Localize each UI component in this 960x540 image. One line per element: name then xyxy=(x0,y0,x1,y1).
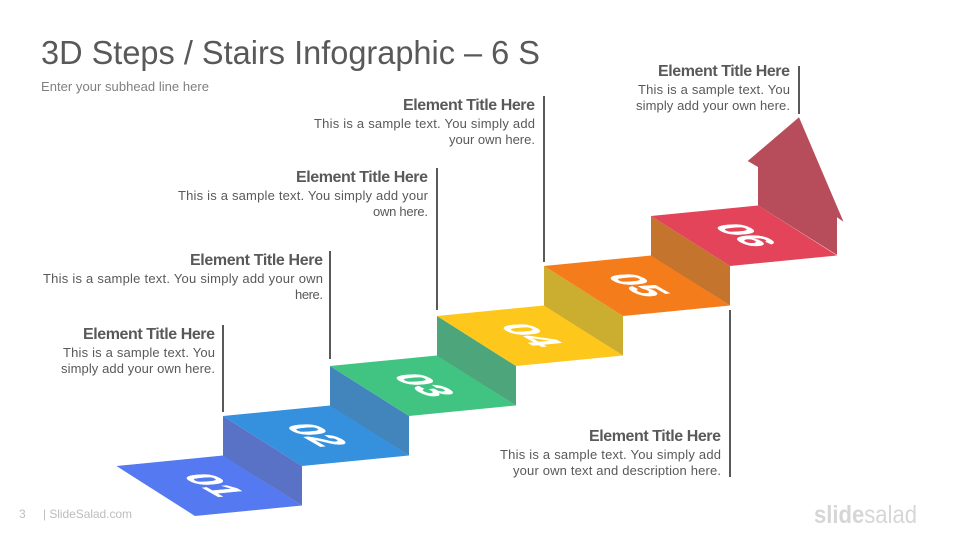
callout: step 3 xyxy=(178,168,438,310)
step 6 tread xyxy=(651,206,837,266)
callout: step 6 xyxy=(636,63,800,114)
callout: step 2 xyxy=(43,251,331,359)
step 1 tread xyxy=(116,456,302,516)
footer site: | SlideSalad.com xyxy=(43,507,132,521)
callout: step 5: Element Title Here xyxy=(589,428,721,445)
number 04: 04 xyxy=(489,322,574,348)
callout: step 2: Element Title Here xyxy=(190,252,323,269)
page number: 3 xyxy=(19,507,26,521)
step 3 riser xyxy=(330,366,409,456)
stair diagram xyxy=(116,117,844,516)
callout: step 1 xyxy=(61,325,224,412)
step 5 tread xyxy=(544,256,730,316)
number 01: 01 xyxy=(172,472,257,498)
callout: step 2: here. xyxy=(295,287,323,302)
step 2 tread xyxy=(223,406,409,466)
callout: step 3: This is a sample text. You simply add your xyxy=(178,188,429,203)
callout: step 1: This is a sample text. You xyxy=(63,345,215,360)
callout: step 5: your own text and description here. xyxy=(513,463,721,478)
callout: step 1: Element Title Here xyxy=(83,326,215,343)
callout: step 4: This is a sample text. You simply add xyxy=(314,116,535,131)
callout: step 6: This is a sample text. You xyxy=(638,82,790,97)
title: 3D Steps / Stairs Infographic – 6 S xyxy=(41,34,540,71)
logo wordmark: slidesalad xyxy=(814,501,917,529)
callout: step 6: Element Title Here xyxy=(658,63,790,80)
number 05: 05 xyxy=(596,272,681,298)
callout: step 6: simply add your own here. xyxy=(636,98,790,113)
callout: step 1: simply add your own here. xyxy=(61,361,215,376)
callout: step 4 xyxy=(314,96,545,262)
number 02: 02 xyxy=(274,422,360,448)
step 2 riser xyxy=(223,416,302,506)
step 4 tread xyxy=(437,306,623,366)
callout: step 4: your own here. xyxy=(449,132,535,147)
arrow: side face xyxy=(748,117,844,255)
callout: step 5: This is a sample text. You simply add xyxy=(500,447,721,462)
step 3 tread xyxy=(330,356,516,416)
subhead: Enter your subhead line here xyxy=(41,79,209,94)
number 06: 06 xyxy=(703,222,788,248)
number 03: 03 xyxy=(382,372,467,398)
step 6 riser xyxy=(651,216,730,306)
step 4 riser xyxy=(437,316,516,406)
callout: step 4: Element Title Here xyxy=(403,97,535,114)
callout: step 2: This is a sample text. You simply add your own xyxy=(43,271,323,286)
callout: step 3: Element Title Here xyxy=(296,169,428,186)
callout: step 5 xyxy=(500,310,731,478)
step 5 riser xyxy=(544,266,623,356)
callout: step 3: own here. xyxy=(373,204,428,219)
